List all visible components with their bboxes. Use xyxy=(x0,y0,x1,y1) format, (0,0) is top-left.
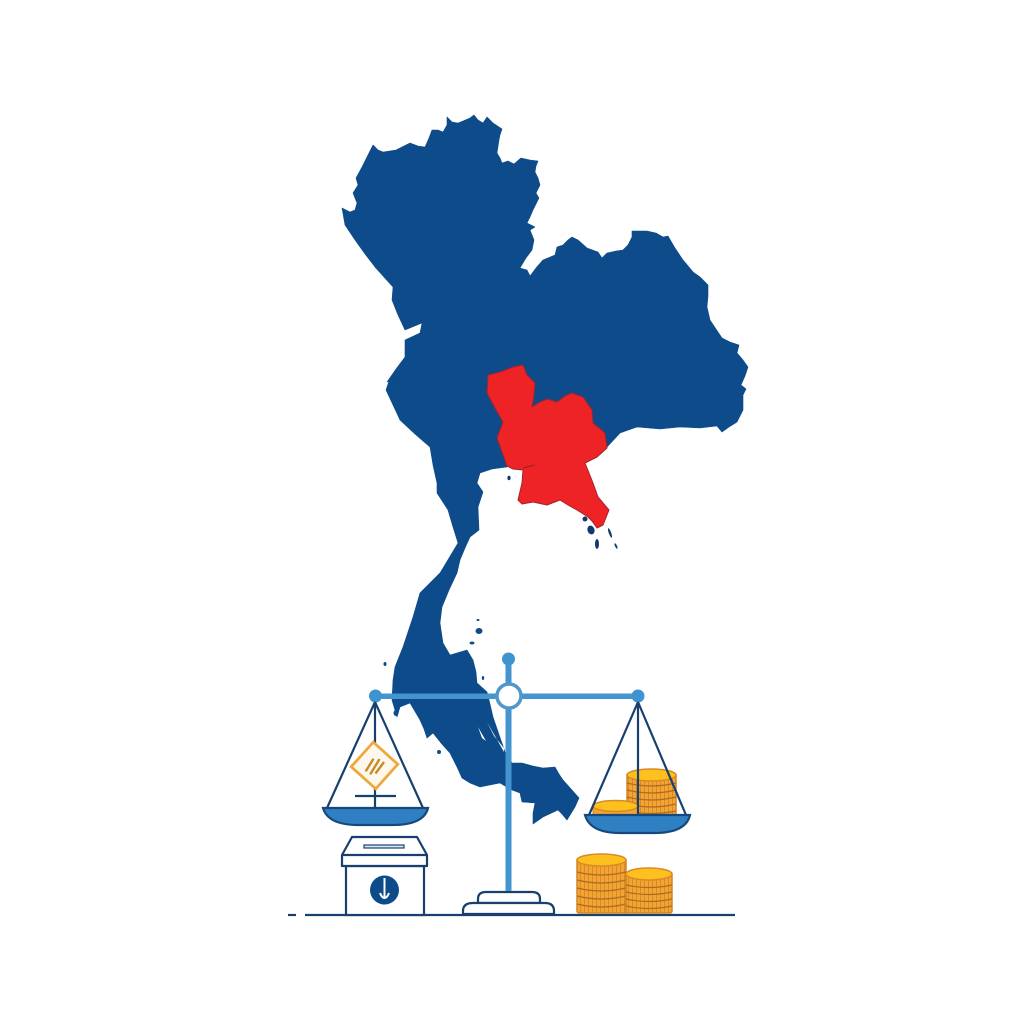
ground line xyxy=(288,914,735,916)
map: gulf islands xyxy=(507,476,618,549)
right pan dish xyxy=(585,815,690,833)
map: red region gulf crease xyxy=(523,465,535,468)
coins on right pan xyxy=(593,769,676,815)
coin stack: right xyxy=(626,868,672,913)
coin stacks on ground xyxy=(577,854,672,913)
left pan strings xyxy=(327,702,423,808)
scale: beam xyxy=(375,694,638,699)
balance scale xyxy=(323,652,690,914)
icon: down arrow badge xyxy=(370,876,399,904)
scale: pivot ring xyxy=(497,684,521,708)
map of Thailand xyxy=(342,115,748,824)
ballot box xyxy=(342,837,427,915)
map: red central region xyxy=(487,365,609,528)
ballot box: body xyxy=(346,866,424,915)
scale: pole xyxy=(506,659,512,891)
coin stack: single coin xyxy=(593,800,638,815)
ballot box: lid xyxy=(342,837,427,866)
coin stack: tall xyxy=(627,769,676,815)
icon: ballot paper diamond xyxy=(351,742,398,789)
map: blue country shape xyxy=(342,115,748,824)
left pan dish xyxy=(323,808,428,825)
scale: end knob right xyxy=(632,690,644,702)
scale: base xyxy=(463,892,554,914)
scale: top knob xyxy=(502,652,515,666)
right pan strings xyxy=(589,702,686,815)
map: white inlet sliver xyxy=(478,722,504,752)
coin stack: left xyxy=(577,854,626,913)
scale: end knob left xyxy=(369,690,382,702)
ballot box: slot xyxy=(364,845,404,848)
map: southern islands xyxy=(384,619,484,754)
